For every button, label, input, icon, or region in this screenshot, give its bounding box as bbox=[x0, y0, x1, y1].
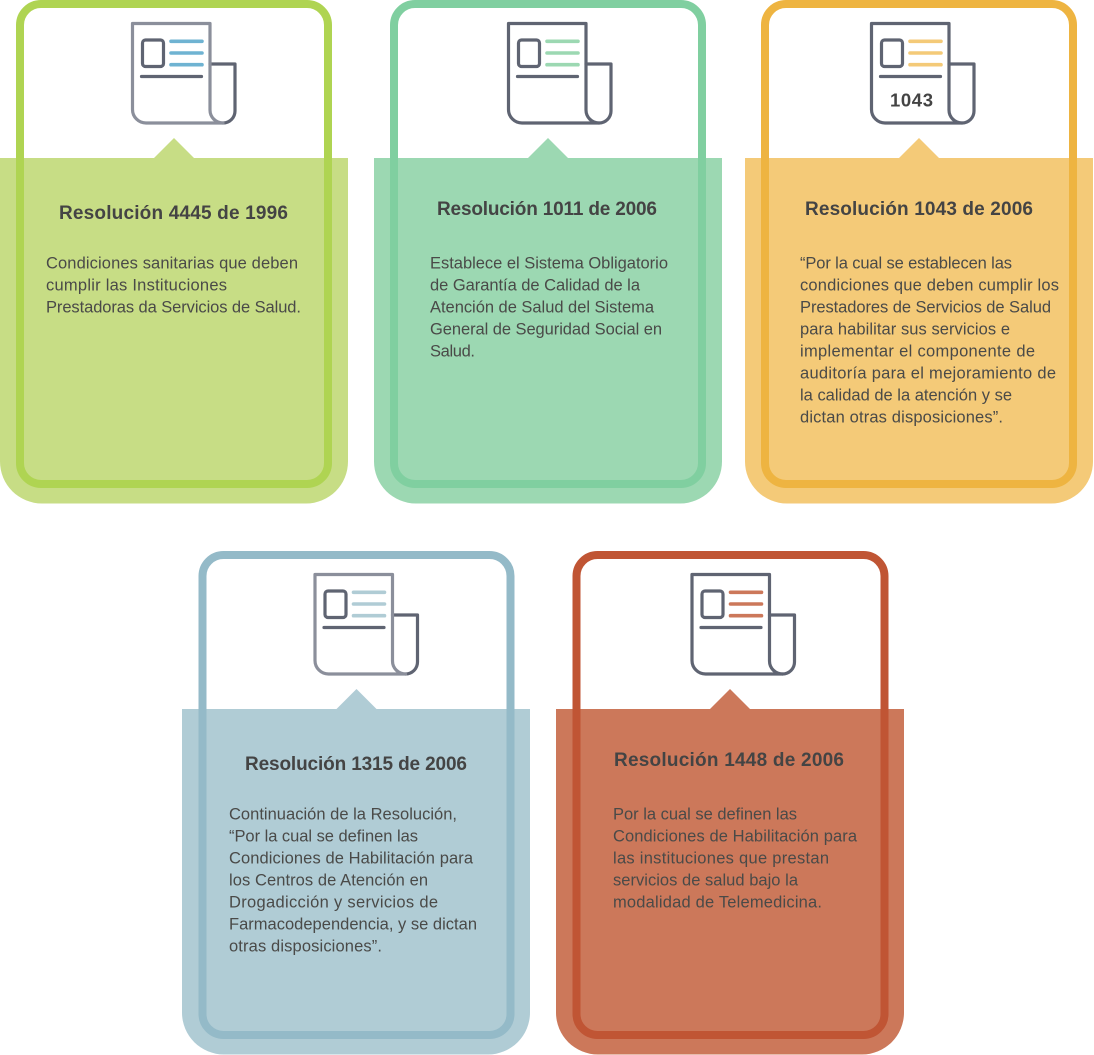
body text: condiciones que deben cumplir los bbox=[800, 276, 1059, 294]
heading: Resolución 1011 de 2006 bbox=[437, 199, 657, 220]
panel: Resolución 1448 de 2006 bbox=[556, 555, 904, 1054]
icon: newspaper bbox=[692, 574, 794, 674]
card background bbox=[182, 709, 530, 1054]
body text: cumplir las Instituciones bbox=[46, 276, 227, 294]
body text: Condiciones de Habilitación para bbox=[613, 827, 858, 845]
panel: Resolución 1315 de 2006 bbox=[182, 555, 530, 1054]
body text: Establece el Sistema Obligatorio bbox=[430, 254, 668, 272]
body text: “Por la cual se establecen las bbox=[800, 254, 1012, 272]
panel: Resolución 4445 de 1996 bbox=[0, 4, 348, 504]
card background bbox=[745, 158, 1093, 504]
card frame bbox=[20, 4, 328, 484]
panel: Resolución 1043 de 2006 bbox=[745, 4, 1093, 504]
body text: Farmacodependencia, y se dictan bbox=[229, 915, 477, 933]
body text: la calidad de la atención y se bbox=[800, 386, 1012, 404]
body text: General de Seguridad Social en bbox=[430, 320, 662, 338]
body text: de Garantía de Calidad de la bbox=[430, 276, 641, 294]
pointer bbox=[528, 138, 568, 158]
heading: Resolución 1043 de 2006 bbox=[805, 199, 1033, 220]
panel: Resolución 1011 de 2006 bbox=[374, 4, 722, 504]
heading: Resolución 1315 de 2006 bbox=[245, 754, 467, 775]
body text bbox=[430, 254, 668, 360]
card frame bbox=[202, 555, 510, 1035]
body text: para habilitar sus servicios e bbox=[800, 320, 1010, 338]
icon: newspaper with number bbox=[872, 24, 974, 123]
body text: Prestadoras da Servicios de Salud. bbox=[46, 298, 301, 316]
card frame bbox=[765, 4, 1073, 484]
pointer bbox=[336, 689, 376, 709]
body text: Drogadicción y servicios de bbox=[229, 893, 438, 911]
body text: implementar el componente de bbox=[800, 342, 1035, 360]
body text: Por la cual se definen las bbox=[613, 805, 797, 823]
body text: Condiciones sanitarias que deben bbox=[46, 254, 298, 272]
body text: los Centros de Atención en bbox=[229, 871, 428, 889]
icon: newspaper bbox=[132, 24, 235, 123]
card background bbox=[0, 158, 348, 504]
body text: otras disposiciones”. bbox=[229, 937, 382, 955]
icon number: 1043 bbox=[890, 90, 933, 110]
body text: dictan otras disposiciones”. bbox=[800, 408, 1003, 426]
body text bbox=[613, 805, 858, 911]
body text: Condiciones de Habilitación para bbox=[229, 849, 474, 867]
card background bbox=[374, 158, 722, 504]
body text: “Por la cual se definen las bbox=[229, 827, 418, 845]
card background bbox=[556, 709, 904, 1054]
icon: newspaper bbox=[508, 24, 611, 123]
body text bbox=[800, 254, 1059, 426]
card frame bbox=[576, 555, 884, 1035]
body text: Continuación de la Resolución, bbox=[229, 805, 457, 823]
icon: newspaper bbox=[315, 574, 418, 674]
body text bbox=[229, 805, 477, 955]
pointer bbox=[899, 138, 939, 158]
body text: auditoría para el mejoramiento de bbox=[800, 364, 1056, 382]
body text: servicios de salud bajo la bbox=[613, 871, 799, 889]
body text bbox=[46, 254, 301, 316]
pointer bbox=[710, 689, 750, 709]
body text: Atención de Salud del Sistema bbox=[430, 298, 655, 316]
body text: las instituciones que prestan bbox=[613, 849, 829, 867]
card frame bbox=[394, 4, 702, 484]
heading: Resolución 1448 de 2006 bbox=[614, 750, 844, 771]
heading: Resolución 4445 de 1996 bbox=[59, 203, 288, 224]
body text: modalidad de Telemedicina. bbox=[613, 893, 822, 911]
pointer bbox=[154, 138, 194, 158]
body text: Salud. bbox=[430, 342, 475, 360]
body text: Prestadores de Servicios de Salud bbox=[800, 298, 1051, 316]
